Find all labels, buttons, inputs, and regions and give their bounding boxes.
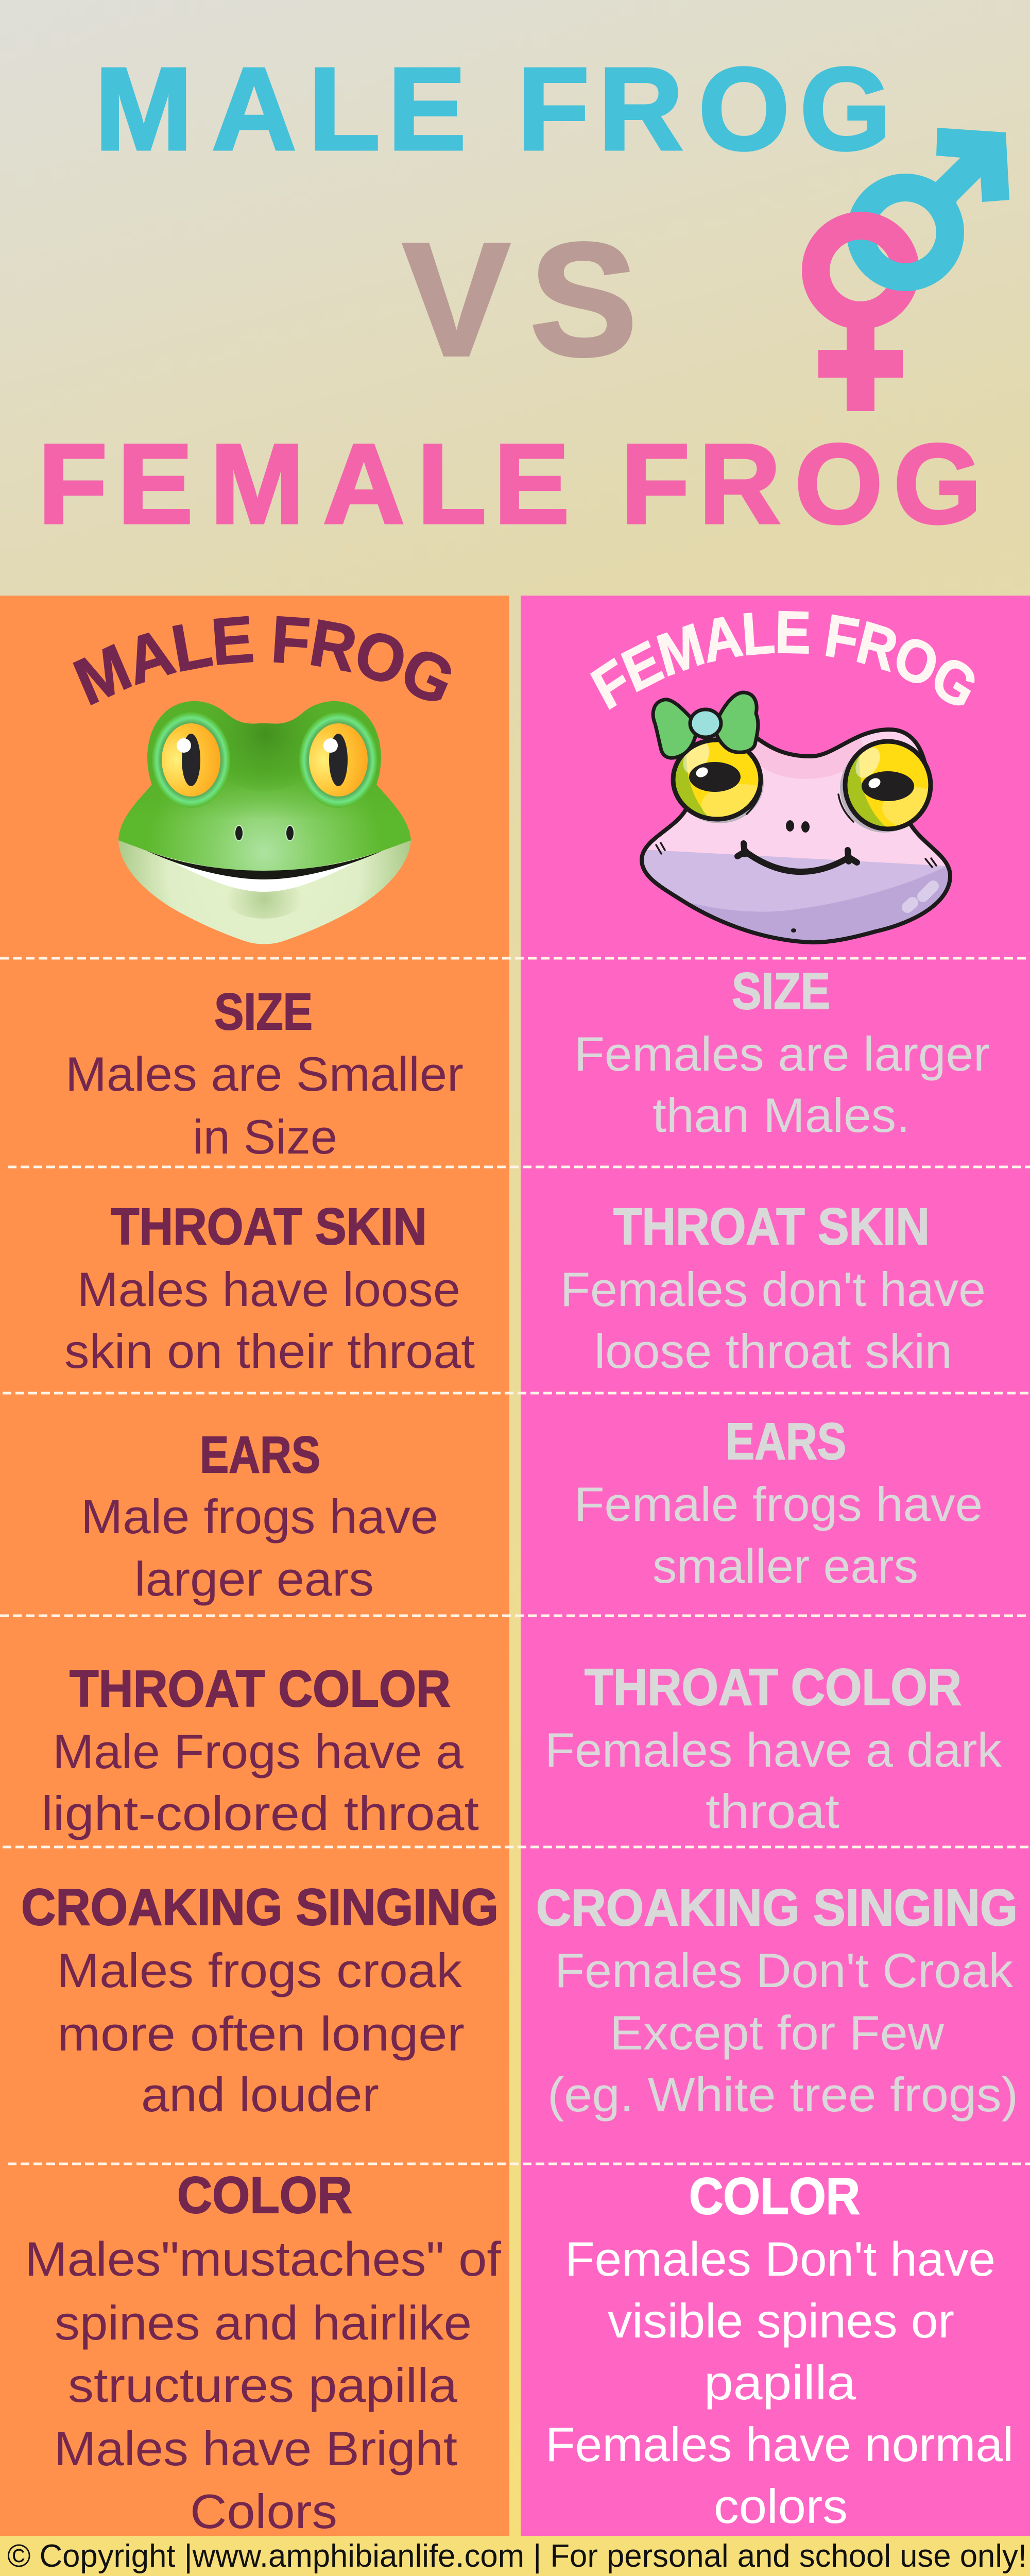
icon: male ring overlap [848, 244, 963, 291]
belly mark [791, 928, 796, 933]
text block: and louder [141, 2067, 379, 2122]
heading: COLOR [689, 2167, 860, 2225]
text block: structures papilla [68, 2358, 458, 2412]
text block: more often longer [57, 2007, 465, 2061]
male: throat skin [64, 1198, 475, 1378]
text block [65, 1047, 464, 1164]
left eye [671, 738, 764, 823]
text block: Females Don't have [565, 2232, 995, 2286]
text block: Except for Few [610, 2006, 945, 2060]
skin creases [656, 790, 936, 867]
text block: Males"mustaches" of [25, 2232, 502, 2286]
icon: male symbol [861, 128, 1009, 277]
nostrils [786, 820, 810, 833]
head fill [644, 732, 948, 941]
text block [574, 1027, 990, 1142]
chin shading [226, 879, 303, 919]
text block [25, 2232, 502, 2538]
white lip [175, 863, 353, 892]
heading: EARS [726, 1413, 846, 1470]
heading: THROAT SKIN [613, 1198, 930, 1256]
text block: colors [714, 2479, 848, 2533]
lower jaw [118, 840, 411, 944]
icon: female symbol [816, 226, 905, 411]
footer band [0, 2536, 1030, 2576]
female: throat color [545, 1658, 1002, 1838]
text block: than Males. [653, 1088, 910, 1142]
text block: visible spines or [608, 2294, 954, 2348]
text block: Males frogs croak [57, 1943, 462, 1997]
heading: CROAKING SINGING [21, 1878, 499, 1936]
text block: spines and hairlike [55, 2296, 472, 2350]
female: throat skin [560, 1198, 986, 1378]
text block: Male Frogs have a [53, 1724, 464, 1778]
male: croaking singing [21, 1878, 499, 2122]
text block: Colors [190, 2484, 337, 2538]
text block: Females Don't Croak [555, 1943, 1014, 1997]
heading: curved female frog: FEMALE FROG [590, 611, 974, 710]
icon: male frog head [118, 683, 412, 944]
icon: female frog head [633, 692, 963, 953]
right eye [840, 739, 933, 833]
female: ears [574, 1413, 983, 1593]
text block: Females have normal [545, 2417, 1014, 2471]
heading: THROAT SKIN [111, 1198, 427, 1256]
title: vs: VS [403, 210, 637, 389]
text block: skin on their throat [64, 1324, 475, 1378]
panel: male column [0, 596, 509, 2536]
left eye [152, 712, 230, 808]
male: color [25, 2166, 502, 2538]
heading: SIZE [732, 962, 830, 1020]
mouth [146, 851, 383, 879]
heading: THROAT COLOR [70, 1660, 451, 1718]
title: female frog: FEMALE FROG [38, 420, 982, 547]
text block: in Size [193, 1110, 337, 1164]
text block [545, 1723, 1002, 1838]
text block: loose throat skin [594, 1324, 952, 1378]
footer copyright text: © Copyright |www.amphibianlife.com | For personal and school use only! [7, 2538, 1027, 2574]
text block: (eg. White tree frogs) [547, 2067, 1018, 2122]
text block: papilla [704, 2355, 856, 2410]
text block: Females have a dark [545, 1723, 1002, 1777]
heading: THROAT COLOR [585, 1658, 962, 1716]
cheek highlight [907, 886, 933, 907]
text block: larger ears [134, 1552, 374, 1606]
text block: Males have Bright [54, 2421, 457, 2476]
bow [653, 692, 758, 758]
text block: Male frogs have [81, 1489, 438, 1544]
text block [547, 1943, 1018, 2122]
text block [560, 1262, 986, 1378]
text block [81, 1489, 438, 1606]
text block [574, 1477, 983, 1593]
heading: SIZE [214, 983, 313, 1041]
male: ears [81, 1426, 438, 1606]
panel: female column [521, 596, 1030, 2536]
text block [64, 1262, 475, 1378]
female: color [545, 2167, 1014, 2533]
text block: Females are larger [574, 1027, 990, 1081]
text block: throat [706, 1784, 839, 1838]
section dividers [0, 958, 1030, 2164]
title: male frog: MALE FROG [95, 44, 891, 175]
right eye [299, 712, 377, 808]
heading: COLOR [177, 2166, 352, 2224]
heading: curved male frog: MALE FROG [73, 616, 451, 706]
icon: interlocked gender symbols [816, 128, 1009, 411]
text block: Males are Smaller [65, 1047, 464, 1101]
text block: smaller ears [653, 1539, 918, 1593]
text block: Female frogs have [574, 1477, 983, 1531]
heading: EARS [200, 1426, 320, 1484]
text block: Males have loose [77, 1262, 460, 1316]
male: throat color [41, 1660, 479, 1840]
text block: Females don't have [560, 1262, 986, 1316]
head outline [642, 730, 950, 942]
text block [57, 1943, 465, 2122]
text block [545, 2232, 1014, 2533]
text block: light-colored throat [41, 1786, 479, 1840]
smile [737, 843, 857, 872]
female: croaking singing [536, 1879, 1018, 2122]
text block [41, 1724, 479, 1840]
nostrils [235, 825, 294, 841]
upper head [118, 701, 411, 871]
female: size [574, 962, 990, 1142]
male: size [65, 983, 464, 1164]
